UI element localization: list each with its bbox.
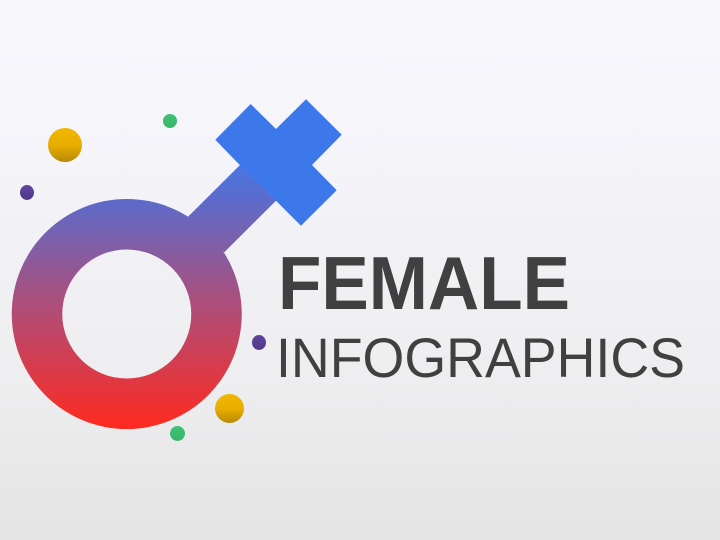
decorative dot: large gold bottom — [215, 394, 244, 423]
title: FEMALE — [278, 241, 570, 325]
subtitle: INFOGRAPHICS — [276, 327, 685, 389]
decorative dot: large gold top — [48, 128, 82, 162]
icon: female symbol — [12, 99, 342, 429]
decorative dot: green top — [163, 114, 177, 128]
symbol stem — [188, 165, 276, 252]
decorative dot: purple left — [20, 185, 34, 200]
symbol cross — [215, 99, 342, 226]
symbol ring — [12, 199, 242, 429]
decorative dot: purple right — [252, 335, 266, 350]
decorative dot: green bottom — [170, 426, 185, 441]
